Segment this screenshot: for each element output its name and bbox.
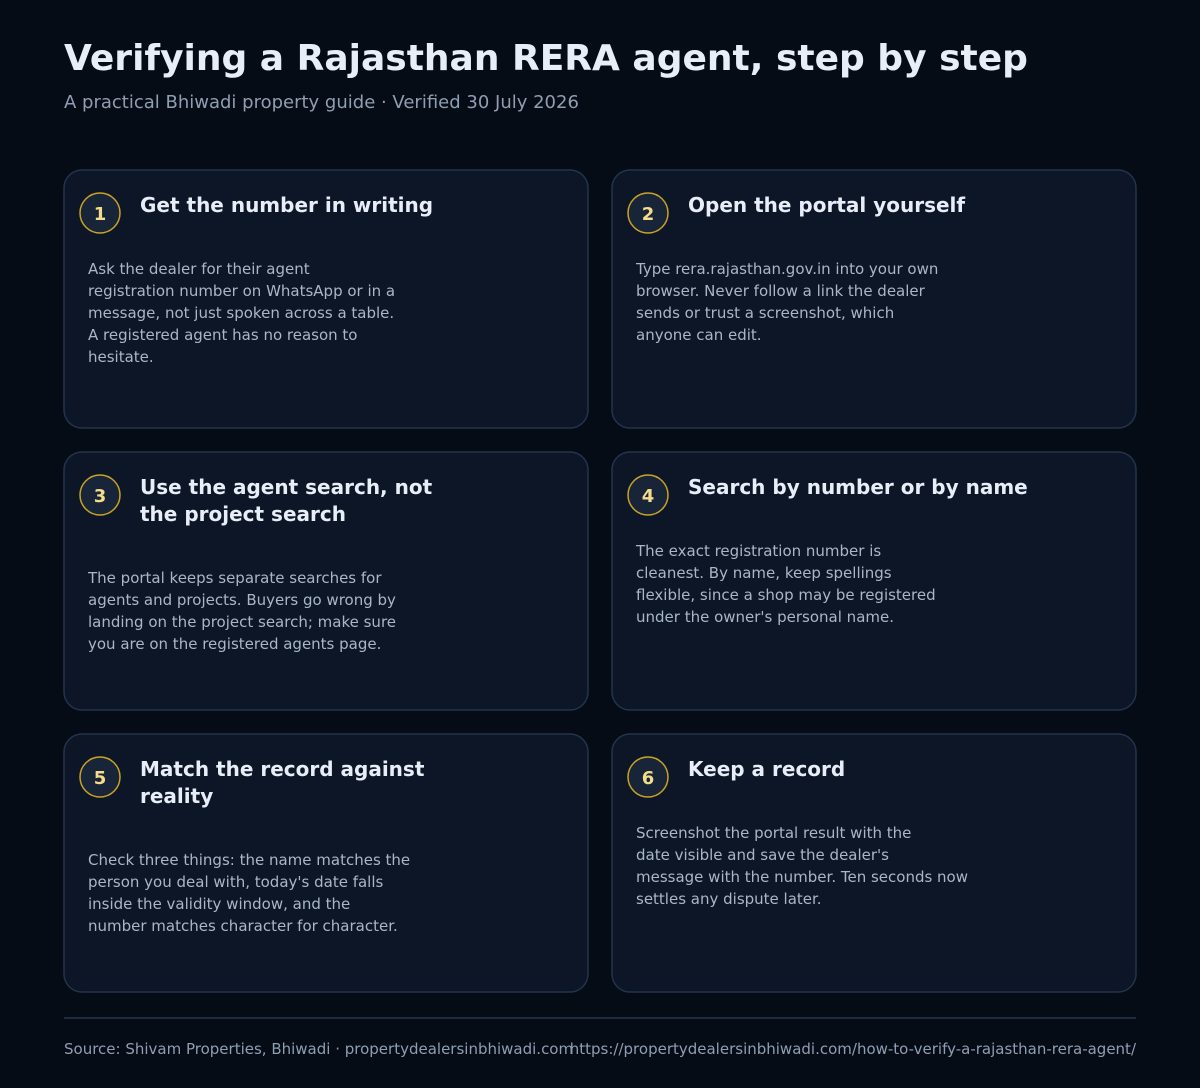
step 5 number badge <box>79 756 121 798</box>
step 2 body text: browser. Never follow a link the dealer <box>636 282 925 300</box>
panel: step 6 <box>611 733 1137 993</box>
step 6 body text <box>636 824 968 908</box>
title: Verifying a Rajasthan RERA agent, step by step <box>64 38 1028 79</box>
step 2 number badge: 2 <box>642 204 654 225</box>
step 2 body text: anyone can edit. <box>636 326 762 344</box>
step 5 heading <box>140 756 424 808</box>
step 5 body text: inside the validity window, and the <box>88 895 350 913</box>
step 1 heading: Get the number in writing <box>140 192 433 216</box>
footer source: Source: Shivam Properties, Bhiwadi · propertydealersinbhiwadi.com <box>64 1040 573 1058</box>
step 3 number badge <box>79 474 121 516</box>
step 3 body text: The portal keeps separate searches for <box>88 569 382 587</box>
step 4 heading: Search by number or by name <box>688 474 1028 498</box>
step 3 body text <box>88 569 396 653</box>
step 4 body text: flexible, since a shop may be registered <box>636 586 936 604</box>
step 5 body text <box>88 851 410 935</box>
panel: step 5 <box>63 733 589 993</box>
step 6 heading: Keep a record <box>688 756 845 780</box>
step 4 body text: under the owner's personal name. <box>636 608 894 626</box>
step 1 number badge <box>79 192 121 234</box>
step 3 body text: you are on the registered agents page. <box>88 635 381 653</box>
step 6 body text: message with the number. Ten seconds now <box>636 868 968 886</box>
step 5 body text: person you deal with, today's date falls <box>88 873 383 891</box>
step 6 number badge: 6 <box>642 768 654 789</box>
panel: step 2 <box>611 169 1137 429</box>
step 6 body text: settles any dispute later. <box>636 890 822 908</box>
step 3 number badge: 3 <box>94 486 106 507</box>
step 6 body text: Screenshot the portal result with the <box>636 824 911 842</box>
step 1 body text: message, not just spoken across a table. <box>88 304 394 322</box>
step 1 body text: hesitate. <box>88 348 154 366</box>
step 5 heading: Match the record against <box>140 756 424 780</box>
step 4 body text: cleanest. By name, keep spellings <box>636 564 892 582</box>
step 3 body text: agents and projects. Buyers go wrong by <box>88 591 396 609</box>
step 4 number badge <box>627 474 669 516</box>
step 1 body text: registration number on WhatsApp or in a <box>88 282 395 300</box>
step 2 number badge <box>627 192 669 234</box>
step 1 number badge: 1 <box>94 204 106 225</box>
step 6 number badge <box>627 756 669 798</box>
step 2 body text <box>636 260 938 344</box>
step 5 body text: number matches character for character. <box>88 917 398 935</box>
step 6 body text: date visible and save the dealer's <box>636 846 889 864</box>
footer url: https://propertydealersinbhiwadi.com/how-to-verify-a-rajasthan-rera-agent/ <box>570 1040 1136 1058</box>
step 3 heading: Use the agent search, not <box>140 474 432 498</box>
step 2 heading: Open the portal yourself <box>688 192 965 216</box>
step 4 body text <box>636 542 936 626</box>
step 3 heading: the project search <box>140 502 346 526</box>
step 1 body text: A registered agent has no reason to <box>88 326 357 344</box>
step 4 body text: The exact registration number is <box>636 542 881 560</box>
step 1 body text: Ask the dealer for their agent <box>88 260 310 278</box>
subtitle: A practical Bhiwadi property guide · Verified 30 July 2026 <box>64 92 579 113</box>
step 3 heading <box>140 474 432 526</box>
step 5 number badge: 5 <box>94 768 106 789</box>
step 5 heading: reality <box>140 784 213 808</box>
panel: step 1 <box>63 169 589 429</box>
step 1 body text <box>88 260 395 366</box>
step 4 number badge: 4 <box>642 486 654 507</box>
step 3 body text: landing on the project search; make sure <box>88 613 396 631</box>
step 5 body text: Check three things: the name matches the <box>88 851 410 869</box>
panel: step 4 <box>611 451 1137 711</box>
step 2 body text: Type rera.rajasthan.gov.in into your own <box>636 260 938 278</box>
step 2 body text: sends or trust a screenshot, which <box>636 304 894 322</box>
panel: step 3 <box>63 451 589 711</box>
